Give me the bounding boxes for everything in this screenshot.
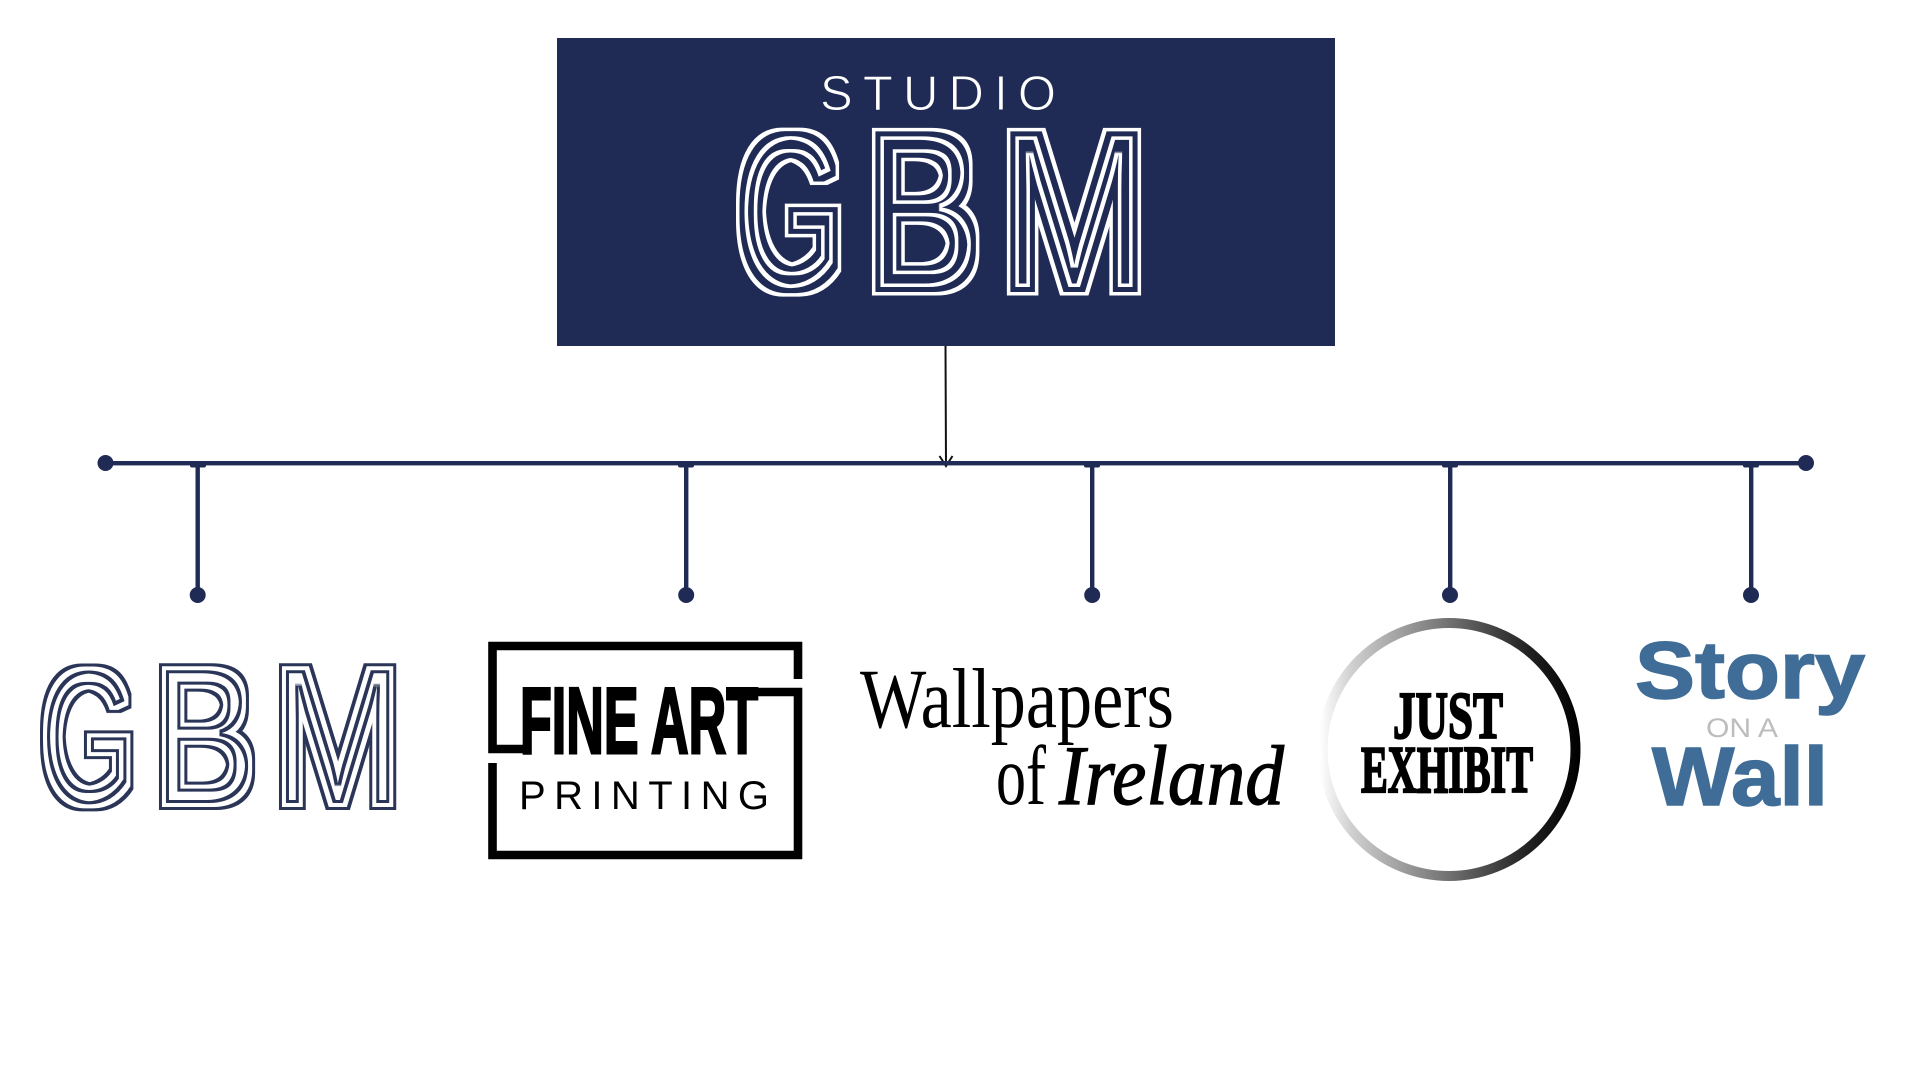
logo: Just Exhibit xyxy=(1322,623,1576,876)
wall: Wall xyxy=(1652,730,1828,823)
connector: horizontal bar with end dots and drops xyxy=(98,455,1814,603)
header label: STUDIO: STUDIO xyxy=(820,67,1056,121)
drop to GBM xyxy=(190,463,206,603)
logo: GBM: B xyxy=(153,630,256,845)
ireland: Ireland xyxy=(1058,729,1284,823)
drop to Just Exhibit xyxy=(1442,463,1458,603)
frame xyxy=(492,646,798,855)
fine art wordmark: FINE ART xyxy=(520,668,758,773)
header background xyxy=(557,38,1335,346)
just: JUST xyxy=(1393,679,1503,753)
header panel: Studio GBM xyxy=(557,38,1335,346)
arrow: header to timeline xyxy=(940,346,952,466)
of: of xyxy=(996,729,1046,823)
header logo: GBM line lettering: M xyxy=(1001,89,1147,334)
gradient ring xyxy=(1322,623,1576,876)
wallpapers line: Wallpapers xyxy=(860,652,1174,746)
drop to Story on a Wall xyxy=(1743,463,1759,603)
drop to Fine Art Printing xyxy=(678,463,694,603)
exhibit: EXHIBIT xyxy=(1361,733,1533,807)
logo: GBM: G xyxy=(41,631,135,843)
printing wordmark: PRINTING xyxy=(519,774,769,818)
logo: Story on a Wall xyxy=(1635,626,1865,823)
logo: GBM: M xyxy=(273,630,402,845)
logo: GBM xyxy=(41,630,402,845)
logo: Fine Art Printing xyxy=(492,646,798,855)
drop to Wallpapers of Ireland xyxy=(1084,463,1100,603)
header logo: GBM line lettering xyxy=(738,89,1147,334)
story: Story xyxy=(1635,626,1865,716)
logo: Wallpapers of Ireland xyxy=(860,652,1284,823)
header logo: GBM line lettering: B xyxy=(866,89,980,334)
on a: ON A xyxy=(1706,713,1778,743)
header logo: GBM line lettering: G xyxy=(738,93,843,333)
